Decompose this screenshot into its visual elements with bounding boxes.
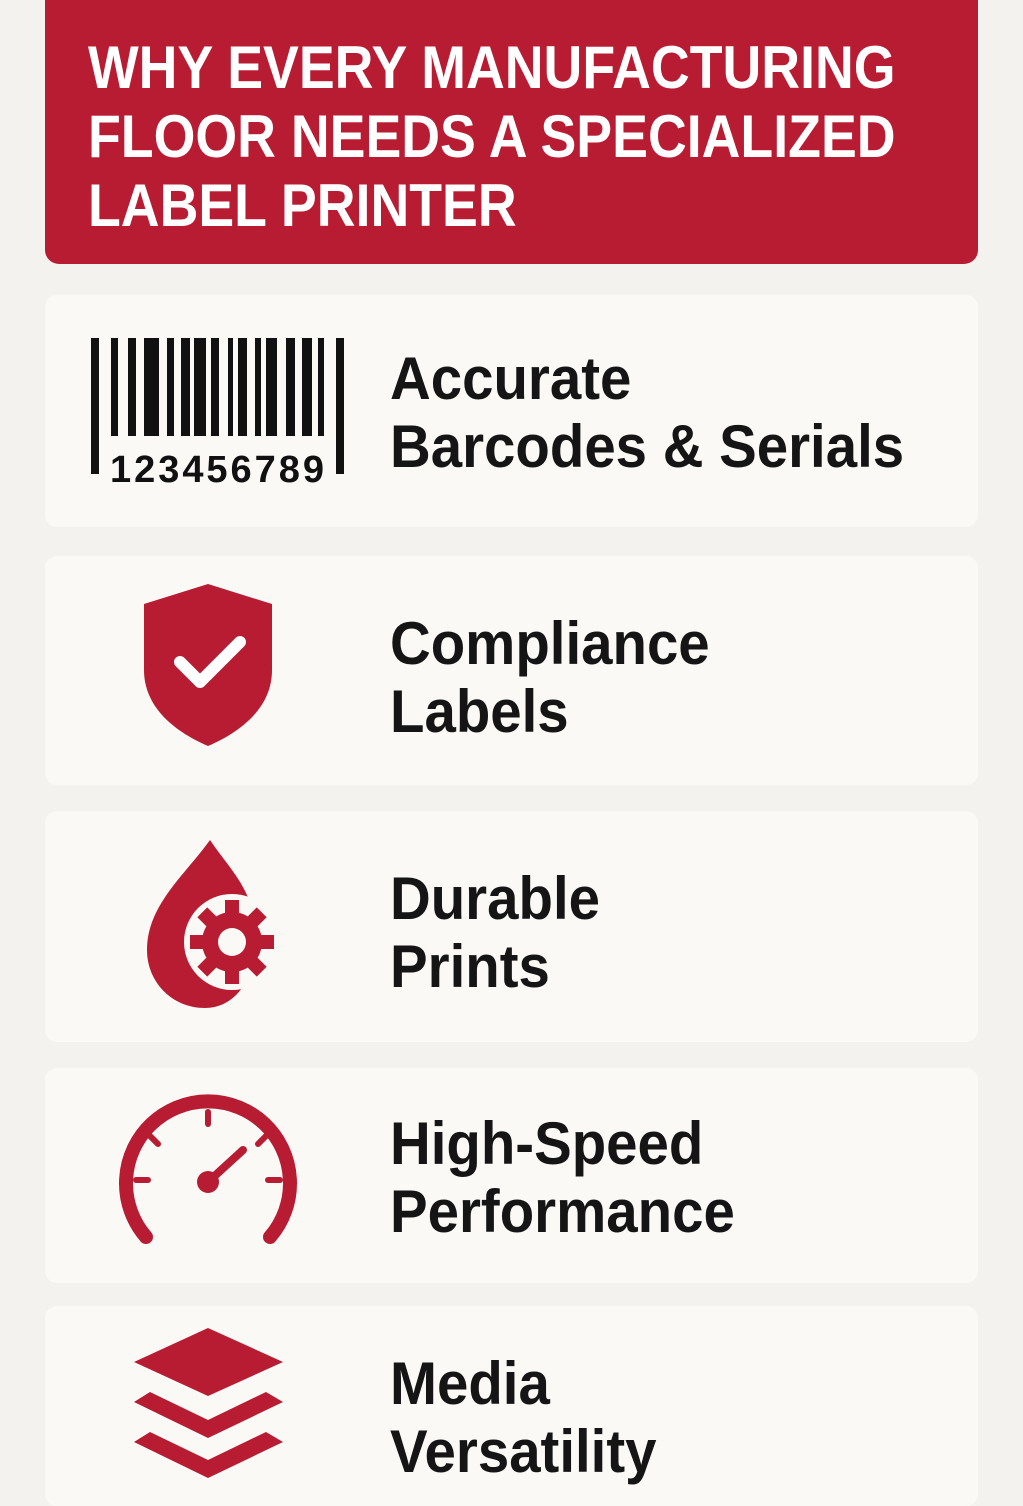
header banner (45, 0, 978, 264)
text: media: Versatility (390, 1418, 657, 1485)
icon: barcode (91, 338, 344, 490)
icon: shield (144, 584, 272, 746)
panel: barcodes (45, 295, 978, 527)
icon: speedometer (119, 1094, 297, 1244)
text: media (390, 1350, 657, 1485)
icon: layers (134, 1328, 283, 1478)
text: compliance (390, 610, 710, 745)
text: barcodes: Accurate (390, 345, 631, 412)
title (88, 34, 896, 239)
text: durable (390, 865, 600, 1000)
text: speed (390, 1110, 735, 1245)
text: compliance: Labels (390, 678, 569, 745)
title: LABEL PRINTER (88, 172, 517, 239)
text: compliance: Compliance (390, 610, 710, 677)
title: WHY EVERY MANUFACTURING (88, 34, 896, 101)
text: media: Media (390, 1350, 550, 1417)
text: durable: Durable (390, 865, 600, 932)
text: barcodes (390, 345, 904, 480)
title: FLOOR NEEDS A SPECIALIZED (88, 103, 896, 170)
panel: durable (45, 811, 978, 1042)
text: speed: High-Speed (390, 1110, 703, 1177)
panel: media (45, 1306, 978, 1506)
text: barcodes: Barcodes & Serials (390, 413, 904, 480)
panel: speed (45, 1068, 978, 1283)
panel: compliance (45, 556, 978, 785)
text: durable: Prints (390, 933, 550, 1000)
icon: barcode: 123456789 (110, 449, 324, 490)
text: speed: Performance (390, 1178, 735, 1245)
icon: drop with gear (147, 840, 274, 1008)
